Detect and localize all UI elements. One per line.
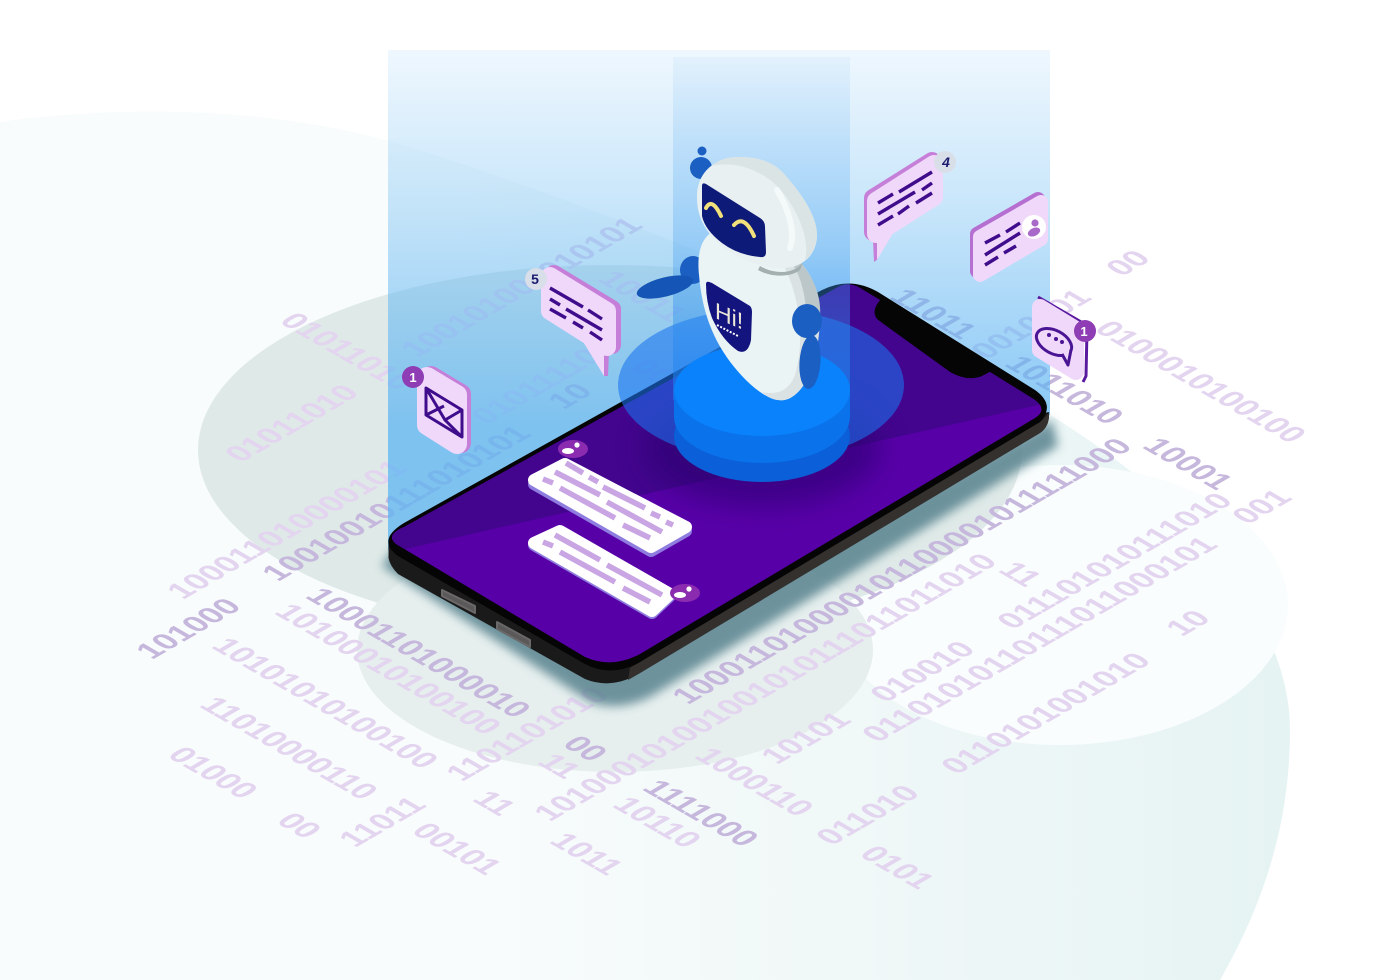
bubble card xyxy=(534,464,686,547)
binary digits running down-right (light): 10101010100100 xyxy=(204,632,447,773)
icon: message bubble five xyxy=(525,268,612,376)
binary digits running up-right (light): 100011010000101 xyxy=(158,455,415,604)
icon: message bubble four xyxy=(873,151,956,262)
bubble tail side xyxy=(603,352,609,376)
binary digits running up-right (dark): 10010010111010101 xyxy=(253,420,539,586)
avatar xyxy=(670,584,700,602)
binary digits running up-right (light): 010010 xyxy=(861,636,983,707)
left arm xyxy=(635,256,706,303)
right arm xyxy=(792,304,822,390)
binary digits running down-right (light): 11 xyxy=(530,748,590,783)
right ear xyxy=(792,200,812,236)
chest screen xyxy=(706,282,752,352)
envelope xyxy=(426,388,462,437)
chest dots xyxy=(717,325,738,336)
binary digits running up-right (light): 1101101010 xyxy=(437,682,617,786)
badge: 1 xyxy=(1080,324,1088,339)
binary digits running up-right (light): 01011010 xyxy=(216,379,367,467)
phone bezel xyxy=(388,283,1047,671)
robot body xyxy=(698,232,820,400)
binary digits running down-right (light): 0101 xyxy=(852,840,944,894)
binary digits running down-right (dark): 10001 xyxy=(1135,432,1242,494)
binary digits running up-right (light): 0010101 xyxy=(962,284,1099,364)
icon: envelope card xyxy=(402,366,462,444)
avatar xyxy=(1022,215,1046,239)
robot xyxy=(635,146,822,400)
binary digits running up-right (light): 10 xyxy=(1157,605,1218,641)
binary digits running down-right (dark): 1111000 xyxy=(635,774,768,851)
bubble tail side xyxy=(873,240,878,262)
bubble tail xyxy=(877,228,896,260)
card face xyxy=(980,202,1041,275)
binary digits running down-right (light): 10011 xyxy=(590,265,695,326)
binary digits running down-right (light): 1011 xyxy=(542,827,632,880)
robot head xyxy=(697,157,817,268)
card face xyxy=(1040,307,1076,372)
chat dots xyxy=(1047,333,1064,344)
binary digits running down-right (dark): 00 xyxy=(555,730,616,766)
binary digits running up-right (dark): 100011010000101100001011111000 xyxy=(663,433,1140,709)
screen dark wedge xyxy=(392,284,1040,549)
phone shadow xyxy=(382,420,1058,706)
bubble face xyxy=(876,164,934,234)
central light beam xyxy=(673,57,850,400)
phone side edge xyxy=(388,412,1049,683)
binary digits running up-right (dark): 101000 xyxy=(127,593,249,664)
neck shadow xyxy=(758,262,803,276)
left ear xyxy=(690,146,712,179)
button two xyxy=(497,622,530,647)
bubble side xyxy=(873,161,932,232)
badge: 5 xyxy=(531,271,539,287)
text lines xyxy=(878,172,932,225)
binary digits running down-right (light): 01000 xyxy=(160,741,267,803)
smartphone xyxy=(388,284,1050,684)
binary digits running up-right (light): 0110101001010 xyxy=(932,648,1159,779)
binary digits running down-right (dark): 10001101000010 xyxy=(298,582,540,722)
binary digits running up-right (dark) xyxy=(127,378,1140,709)
binary digits running down-right (light): 10110 xyxy=(605,791,710,852)
badge: 4 xyxy=(941,154,950,170)
binary digits running down-right (light): 11010000110 xyxy=(192,691,387,804)
visor xyxy=(702,183,766,257)
card side xyxy=(977,199,1038,271)
bubble shadow xyxy=(534,533,670,613)
cylinder base xyxy=(674,344,850,482)
bubble card xyxy=(534,531,670,611)
bubble tail xyxy=(582,340,604,376)
bubble shadow xyxy=(534,466,686,551)
text lines xyxy=(543,463,673,538)
binary digits running up-right (light): 101000101001001010111011011010 xyxy=(525,548,1005,826)
binary digits running down-right (light): 00 xyxy=(269,807,330,843)
outer light beam panel xyxy=(388,50,1050,550)
card edge xyxy=(1038,297,1087,382)
binary digits running down-right (light): 11 xyxy=(465,785,525,820)
binary digits running up-right (light): 001 xyxy=(1223,484,1300,529)
head top shading xyxy=(712,157,817,260)
binary digits running up-right (light): 11011 xyxy=(330,791,434,852)
binary digits running up-right (light): 01101010110111011000101 xyxy=(853,531,1225,747)
body outer shading xyxy=(793,262,820,318)
binary digits running down-right (light): 11 xyxy=(991,556,1051,591)
binary digits running down-right (light): 00 xyxy=(623,353,684,389)
binary digits running up-right (dark): 10 xyxy=(539,378,600,414)
bubble side xyxy=(554,274,612,345)
card face xyxy=(427,377,457,444)
phone right side highlight xyxy=(628,412,1049,680)
chat glyph xyxy=(1032,323,1076,365)
binary digits running up-right (light) xyxy=(158,212,1300,852)
card side xyxy=(431,376,461,443)
icon: chat card xyxy=(1032,297,1096,382)
greeting text: Hi! xyxy=(715,298,743,336)
glowing disc xyxy=(618,309,904,461)
binary digits running down-right (light) xyxy=(160,265,1315,894)
text lines xyxy=(985,223,1020,265)
binary digits running up-right (light): 011101010111010 xyxy=(988,488,1241,634)
binary digits running down-right (dark): 1011010 xyxy=(997,350,1133,429)
binary digits running down-right (light): 10100010100100 xyxy=(267,598,510,739)
binary digits running up-right (light): 011010 xyxy=(807,780,928,850)
binary digits running up-right (light): 00 xyxy=(1097,245,1158,281)
screen shadow under base xyxy=(644,432,888,516)
button one xyxy=(442,590,475,613)
binary digits running up-right (light): 10101 xyxy=(752,707,859,769)
binary digits running down-right (dark) xyxy=(298,283,1242,851)
body shading band xyxy=(762,262,820,400)
binary digits running down-right (light): 1000110 xyxy=(687,742,823,821)
badge: 1 xyxy=(409,370,417,385)
chat message two xyxy=(534,531,700,613)
text lines xyxy=(550,288,602,340)
binary digits running down-right (light): 00101 xyxy=(404,817,511,879)
text lines xyxy=(543,535,662,602)
icon: contact card xyxy=(977,199,1046,275)
binary digits running up-right (light): 01011110 xyxy=(462,343,610,429)
binary digits running down-right (dark): 11011 xyxy=(882,283,986,344)
bubble face xyxy=(550,276,607,347)
avatar xyxy=(558,440,588,458)
chat message one xyxy=(534,440,686,551)
binary digits running up-right (light): 100101001010101 xyxy=(392,212,651,362)
binary digits running down-right (light): 01011010 xyxy=(272,307,423,395)
phone screen xyxy=(392,284,1042,662)
head highlight xyxy=(777,190,792,248)
eyes xyxy=(706,204,754,236)
binary digits running down-right (light): 0100010100100 xyxy=(1087,315,1315,447)
